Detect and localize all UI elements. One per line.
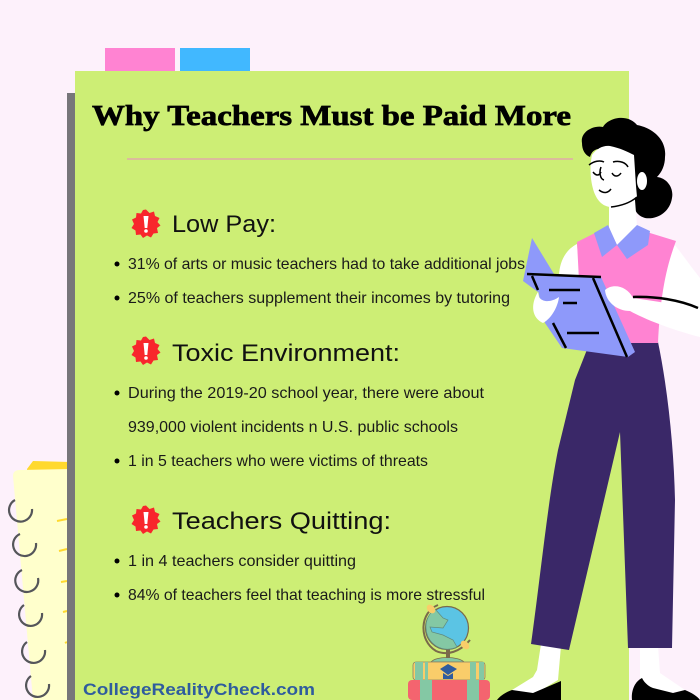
- legs and shoes: [497, 342, 700, 700]
- collar: [594, 225, 650, 259]
- bullet list: 84% of teachers feel that teaching is more stressful: [128, 587, 485, 604]
- heading: Low Pay:: [172, 211, 276, 238]
- icon: globe on books: [408, 603, 490, 700]
- ear: [637, 172, 647, 190]
- icon: alert badge: [132, 506, 160, 534]
- pink tab: [105, 48, 175, 71]
- heading: Toxic Environment:: [172, 340, 400, 367]
- face: [591, 146, 637, 207]
- icon: alert badge: [132, 336, 160, 365]
- bullet list: 1 in 5 teachers who were victims of threats: [128, 453, 428, 470]
- bullet list: 939,000 violent incidents n U.S. public schools: [128, 419, 458, 436]
- bullet list: During the 2019-20 school year, there were about: [128, 385, 485, 402]
- left sleeve: [559, 244, 580, 276]
- bullet list: [114, 256, 525, 307]
- bullet list: 25% of teachers supplement their incomes by tutoring: [128, 290, 510, 307]
- notebook behind panel: [9, 461, 70, 700]
- grey spine: [67, 93, 75, 700]
- divider: [127, 158, 573, 160]
- hair: [582, 118, 672, 218]
- bullet list: [114, 553, 485, 604]
- face details: [589, 161, 637, 207]
- right sleeve: [660, 245, 700, 337]
- section: toxic environment: [114, 336, 485, 470]
- green panel: [75, 71, 629, 700]
- blue tab: [180, 48, 250, 71]
- vest: [577, 233, 676, 343]
- bullet list: 1 in 4 teachers consider quitting: [128, 553, 356, 570]
- neck: [609, 200, 637, 245]
- book: [523, 238, 635, 357]
- heading: Teachers Quitting:: [172, 508, 391, 535]
- hands and forearm: [533, 286, 700, 337]
- title: Why Teachers Must be Paid More: [92, 101, 571, 132]
- bullet list: [114, 385, 485, 470]
- section: low pay: [114, 210, 525, 307]
- section: teachers quitting: [114, 506, 485, 604]
- icon: alert badge: [132, 210, 160, 238]
- illustration: teacher: [497, 118, 700, 700]
- bullet list: 31% of arts or music teachers had to take additional jobs: [128, 256, 525, 273]
- footer website: CollegeRealityCheck.com: [83, 680, 315, 699]
